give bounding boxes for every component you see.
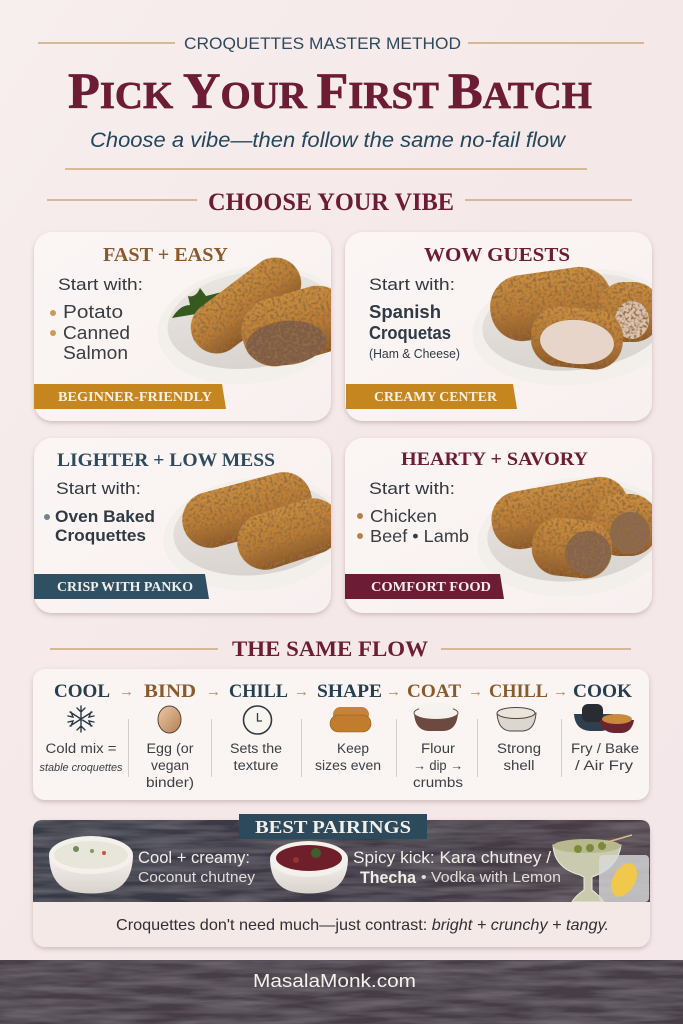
text: spicy kick: • Vodka with Lemon <box>421 869 561 886</box>
icon: bowl of flour <box>414 702 458 731</box>
title: PICK YOUR FIRST BATCH <box>68 64 592 120</box>
text: start with: Start with: <box>369 275 455 294</box>
photo: plate of oven baked croquettes <box>173 472 331 576</box>
step captions: / Air Fry <box>575 758 633 773</box>
step headings with arrows: COOK <box>573 681 632 702</box>
website: MasalaMonk.com <box>253 971 416 991</box>
step captions: crumbs <box>413 775 463 790</box>
recipe name <box>44 507 155 545</box>
heading: FAST + EASY <box>103 244 229 266</box>
ribbon: beginner-friendly: BEGINNER-FRIENDLY <box>58 389 212 404</box>
tagline: Croquettes don't need much—just contrast: bright + crunchy + tangy. <box>116 917 609 934</box>
ingredient list <box>50 302 130 363</box>
step headings with arrows: CHILL <box>229 681 288 702</box>
step headings with arrows: → <box>294 683 309 700</box>
step headings with arrows: COAT <box>407 681 461 702</box>
icon: clock <box>244 706 272 734</box>
icon: bowl of crumbs <box>497 708 536 731</box>
ribbon: crisp with panko <box>34 574 209 599</box>
step captions <box>40 741 639 790</box>
recipe name: Oven Baked <box>55 507 155 526</box>
step headings with arrows: → <box>206 683 221 700</box>
step captions: texture <box>234 758 278 773</box>
ingredient list: Canned <box>63 323 130 343</box>
text: spicy kick <box>353 848 561 887</box>
step headings with arrows: SHAPE <box>317 681 382 702</box>
heading: HEARTY + SAVORY <box>401 449 588 470</box>
step headings with arrows: CHILL <box>489 681 548 702</box>
step headings with arrows: → <box>468 683 483 700</box>
ingredient list: Potato <box>63 302 123 322</box>
step captions: Sets the <box>230 741 282 756</box>
ribbon: comfort food <box>345 574 504 599</box>
heading tab <box>239 814 427 839</box>
panel: best pairings <box>33 814 650 947</box>
step captions: shell <box>504 758 534 773</box>
text: cool + creamy <box>138 848 256 886</box>
recipe name <box>369 302 460 361</box>
text: start with: Start with: <box>369 479 455 498</box>
ribbon: creamy center <box>346 384 517 409</box>
section heading: choose your vibe: CHOOSE YOUR VIBE <box>208 189 454 216</box>
step captions: Fry / Bake <box>571 741 639 756</box>
panel: wow guests <box>345 232 683 421</box>
ingredient list: Beef • Lamb <box>370 526 469 546</box>
ribbon: beginner-friendly <box>34 384 226 409</box>
text: spicy kick: Spicy kick: Kara chutney / <box>353 848 551 867</box>
step captions: stable croquettes <box>40 762 123 774</box>
icon: shaped croquettes <box>330 707 371 732</box>
dark stone band <box>33 820 650 902</box>
recipe name: Croquetas <box>369 323 451 343</box>
step headings with arrows: → <box>553 683 568 700</box>
panel: hearty + savory <box>345 438 679 613</box>
step headings with arrows: → <box>119 683 134 700</box>
ribbon: crisp with panko: CRISP WITH PANKO <box>57 579 193 594</box>
panel: the same flow process <box>33 669 649 800</box>
photo: plate of chicken and beef croquettes <box>487 476 652 582</box>
text: start with: Start with: <box>56 479 141 498</box>
step captions: vegan <box>151 758 189 773</box>
icon: coconut chutney bowl <box>49 836 133 894</box>
step captions: Cold mix = <box>46 741 117 756</box>
icon: egg <box>158 706 181 733</box>
text: cool + creamy: Coconut chutney <box>138 869 256 886</box>
step captions: binder) <box>146 775 194 790</box>
column dividers <box>128 719 562 777</box>
step captions: Keep <box>337 741 369 756</box>
ingredient list <box>357 506 469 546</box>
step headings with arrows: → <box>386 683 401 700</box>
step headings with arrows: BIND <box>144 681 196 702</box>
heading: LIGHTER + LOW MESS <box>57 450 275 471</box>
text: start with: Start with: <box>58 275 143 294</box>
recipe name: Croquettes <box>55 526 146 545</box>
heading: WOW GUESTS <box>424 244 570 266</box>
panel: lighter + low mess <box>34 438 354 613</box>
text: spicy kick: Thecha <box>360 868 416 887</box>
eyebrow heading: CROQUETTES MASTER METHOD <box>184 34 461 53</box>
section heading: the same flow: THE SAME FLOW <box>232 636 428 661</box>
icon: pans for cooking <box>574 704 634 733</box>
step captions: → dip → <box>413 758 463 773</box>
panel: fast + easy <box>34 232 358 421</box>
step headings with arrows: COOL <box>54 681 110 702</box>
recipe name: (Ham & Cheese) <box>369 346 460 361</box>
ribbon: creamy center: CREAMY CENTER <box>374 389 497 404</box>
icon: martini and lemon vodka glass <box>553 835 649 902</box>
step headings with arrows <box>54 681 632 702</box>
step captions: sizes even <box>315 758 381 773</box>
step captions: Flour <box>421 741 456 756</box>
step captions: Egg (or <box>146 741 194 756</box>
photo: plate of croquettes with parsley <box>168 257 331 369</box>
ingredient list: Chicken <box>370 506 437 526</box>
icon: thecha bowl <box>270 841 348 894</box>
subtitle: Choose a vibe—then follow the same no-fail flow <box>90 129 567 152</box>
icon: snowflake <box>68 706 94 732</box>
footer band <box>0 960 683 1024</box>
text: cool + creamy: Cool + creamy: <box>138 848 250 867</box>
photo: plate of spanish croquetas <box>482 266 652 371</box>
step captions: Strong <box>497 741 541 756</box>
ingredient list: Salmon <box>63 343 128 363</box>
ribbon: comfort food: COMFORT FOOD <box>371 579 491 594</box>
heading tab: BEST PAIRINGS <box>255 817 411 837</box>
recipe name: Spanish <box>369 302 441 322</box>
